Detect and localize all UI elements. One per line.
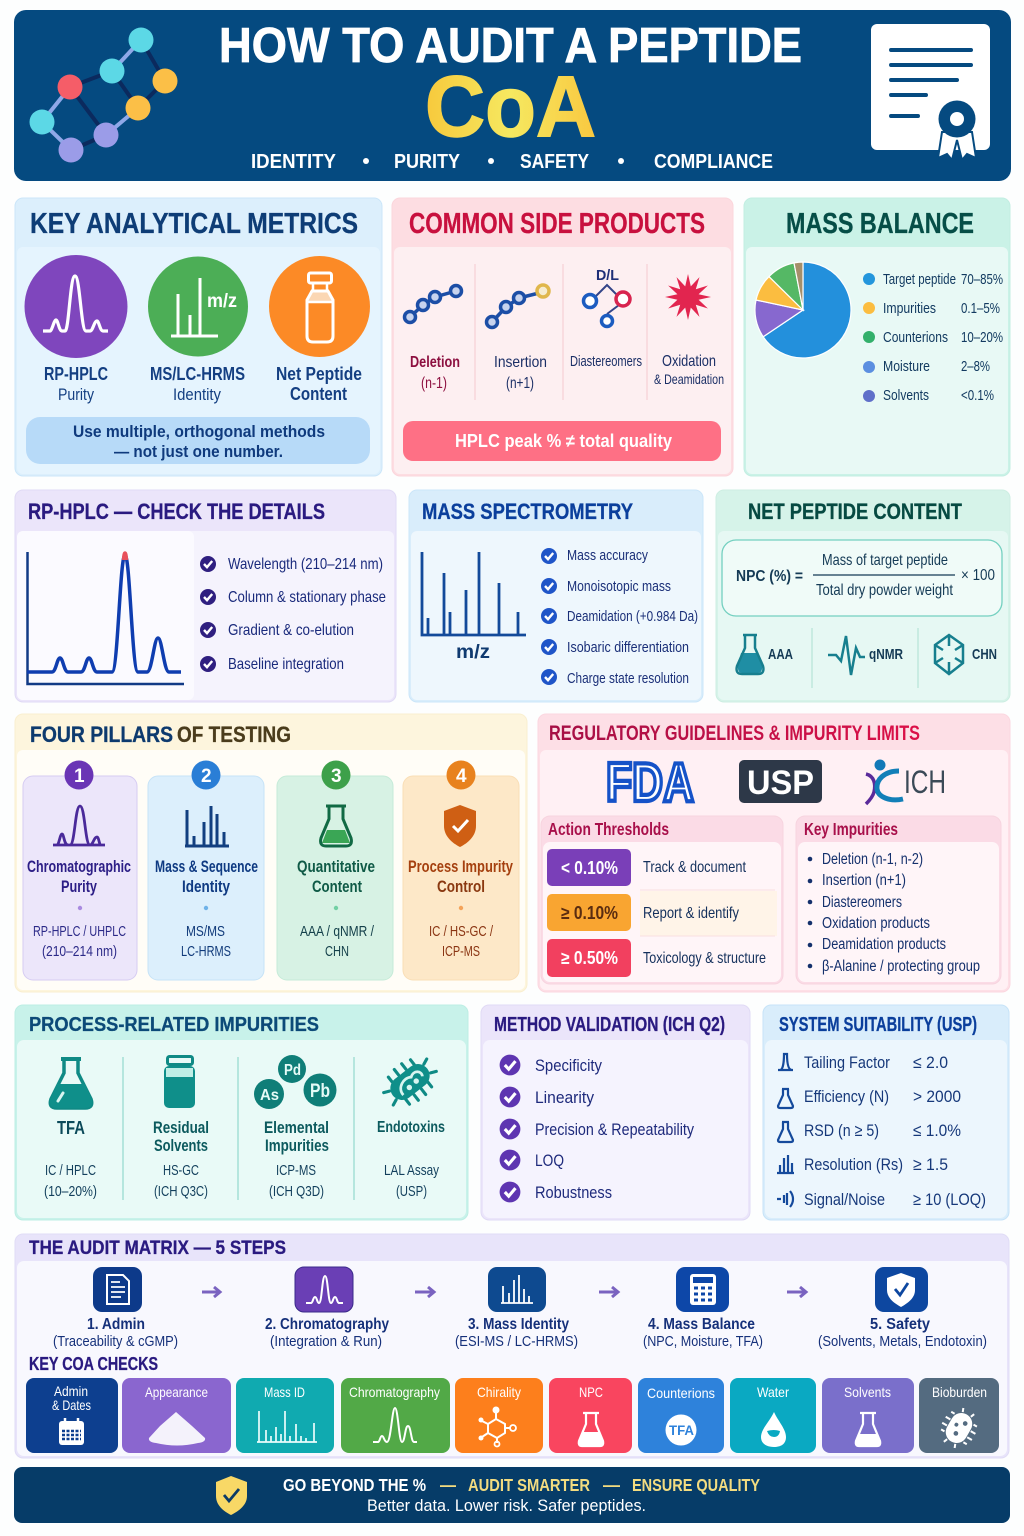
side product labels bbox=[410, 353, 724, 392]
pillar 1: chromatographic purity: 1 bbox=[74, 766, 85, 787]
tile: chirality bbox=[455, 1378, 543, 1453]
panel: mass spectrometry bbox=[409, 490, 703, 702]
check list: Column & stationary phase bbox=[228, 589, 386, 606]
step 2: chromatography: (Integration & Run) bbox=[270, 1334, 382, 1350]
tile: chromatography bbox=[341, 1378, 450, 1453]
suitability table: Tailing Factor bbox=[804, 1053, 890, 1072]
impurity labels: TFA bbox=[57, 1118, 85, 1138]
footer headline: AUDIT SMARTER bbox=[468, 1475, 590, 1495]
step 4: mass balance: (NPC, Moisture, TFA) bbox=[643, 1334, 763, 1350]
footer headline: — bbox=[440, 1475, 456, 1495]
icon: MS circle bbox=[148, 256, 248, 356]
test methods: IC / HPLC bbox=[45, 1162, 96, 1179]
action thresholds box: Toxicology & structure bbox=[643, 950, 766, 967]
icon: TFA flask bbox=[50, 1059, 92, 1108]
icon: vial circle bbox=[269, 256, 370, 357]
panel: four pillars of testing bbox=[15, 714, 527, 992]
tile: mass ID: Mass ID bbox=[264, 1384, 305, 1400]
formula box bbox=[722, 540, 1002, 616]
icon: deletion chain bbox=[404, 286, 462, 322]
subtitle pillars bbox=[251, 151, 773, 173]
threshold chip: 0.10: ≥ 0.10% bbox=[561, 903, 618, 923]
test methods bbox=[44, 1162, 439, 1200]
validation check list: LOQ bbox=[535, 1151, 564, 1170]
footer headline: — bbox=[603, 1475, 620, 1495]
icon: oxidation star bbox=[665, 274, 711, 320]
threshold chip: below 0.10 bbox=[547, 849, 631, 886]
pillar 3: quantitative content: Content bbox=[312, 878, 362, 896]
tile: NPC bbox=[549, 1378, 632, 1453]
pillar 4: process impurity control: Process Impurity bbox=[408, 858, 514, 876]
test methods: (ICH Q3C) bbox=[154, 1183, 208, 1200]
formula box: NPC (%) = bbox=[736, 568, 803, 585]
pillar 3: quantitative content: 3 bbox=[331, 766, 342, 787]
footer headline: ENSURE QUALITY bbox=[632, 1475, 760, 1495]
validation check list bbox=[500, 1055, 694, 1202]
pillar 2: mass and sequence identity: Mass & Sequence bbox=[155, 858, 258, 876]
key impurities box: Key Impurities bbox=[804, 819, 898, 839]
panel: mass balance bbox=[744, 198, 1010, 476]
check list: Deamidation (+0.984 Da) bbox=[567, 608, 698, 625]
key impurities box: Oxidation products bbox=[822, 915, 930, 932]
pillar 4: process impurity control: IC / HS-GC / bbox=[429, 923, 494, 940]
suitability table: ≤ 2.0 bbox=[913, 1053, 948, 1072]
heading: RP-HPLC — CHECK THE DETAILS bbox=[28, 499, 325, 524]
legend: Moisture bbox=[883, 358, 930, 375]
heading: THE AUDIT MATRIX — 5 STEPS bbox=[29, 1237, 286, 1259]
tile: admin and dates: Admin bbox=[54, 1383, 88, 1399]
test methods: LAL Assay bbox=[384, 1162, 439, 1179]
suitability table bbox=[804, 1053, 986, 1209]
pillar 1: chromatographic purity bbox=[23, 760, 137, 980]
step 1: admin: (Traceability & cGMP) bbox=[53, 1334, 178, 1350]
pillar 2: mass and sequence identity: Identity bbox=[182, 878, 231, 896]
subtitle pillars: COMPLIANCE bbox=[654, 151, 773, 173]
logo: USP: USP bbox=[747, 764, 814, 802]
arrow bbox=[599, 1287, 618, 1297]
icon: peptide molecule network bbox=[30, 28, 178, 162]
step 5: safety: 5. Safety bbox=[870, 1316, 930, 1333]
pillar 3: quantitative content: CHN bbox=[325, 943, 349, 960]
icon: certificate document bbox=[871, 24, 990, 160]
icon: elemental impurities: Pd bbox=[284, 1062, 301, 1079]
metric labels: Purity bbox=[58, 385, 94, 404]
test methods: (USP) bbox=[396, 1183, 427, 1200]
suitability table: Signal/Noise bbox=[804, 1190, 885, 1209]
panel: common side products bbox=[392, 198, 733, 476]
pillar 4: process impurity control: 4 bbox=[456, 766, 467, 787]
heading: MASS BALANCE bbox=[786, 208, 974, 240]
action thresholds box: Action Thresholds bbox=[548, 819, 669, 839]
heading: COMMON SIDE PRODUCTS bbox=[409, 208, 705, 240]
legend: Target peptide bbox=[883, 271, 956, 288]
suitability table: ≤ 1.0% bbox=[913, 1121, 961, 1140]
tile: NPC: NPC bbox=[579, 1384, 603, 1400]
validation check list: Precision & Repeatability bbox=[535, 1120, 694, 1139]
icon: CHN hexagon: CHN bbox=[972, 646, 997, 663]
pillar 2: mass and sequence identity: 2 bbox=[201, 766, 212, 787]
arrow bbox=[787, 1287, 806, 1297]
icon: AAA flask bbox=[737, 635, 793, 674]
icon: elemental impurities bbox=[254, 1055, 336, 1109]
pillar 2: mass and sequence identity bbox=[148, 760, 264, 980]
heading: NET PEPTIDE CONTENT bbox=[748, 499, 962, 524]
check list: Mass accuracy bbox=[567, 547, 648, 564]
key impurities box: Insertion (n+1) bbox=[822, 872, 906, 889]
side product labels: Oxidation bbox=[662, 353, 716, 370]
pillar 1: chromatographic purity: Chromatographic bbox=[27, 858, 131, 876]
impurity labels: Residual bbox=[153, 1119, 209, 1137]
icon: insertion chain bbox=[486, 285, 549, 328]
formula box: × 100 bbox=[961, 567, 995, 584]
tile: admin and dates bbox=[26, 1378, 118, 1453]
mass spectrum: m/z bbox=[456, 642, 490, 663]
callout: orthogonal methods: — not just one number. bbox=[114, 442, 283, 461]
arrow bbox=[415, 1287, 434, 1297]
tile: bioburden bbox=[919, 1378, 999, 1453]
key impurities box: Deletion (n-1, n-2) bbox=[822, 851, 923, 868]
mass spectrum bbox=[422, 552, 526, 663]
icon: qNMR pulse: qNMR bbox=[869, 646, 903, 663]
callout: orthogonal methods bbox=[26, 417, 370, 464]
subheading: key CoA checks: KEY COA CHECKS bbox=[29, 1353, 158, 1374]
legend: 70–85% bbox=[961, 271, 1003, 288]
check list: Gradient & co-elution bbox=[228, 622, 354, 639]
heading: KEY ANALYTICAL METRICS bbox=[30, 208, 358, 240]
tile: counterions: TFA bbox=[669, 1422, 694, 1438]
step 4: mass balance: 4. Mass Balance bbox=[648, 1316, 755, 1333]
legend: Solvents bbox=[883, 387, 929, 404]
icon: CHN hexagon bbox=[935, 635, 997, 674]
check list bbox=[200, 556, 386, 673]
heading: MASS SPECTROMETRY bbox=[422, 499, 633, 524]
pie chart bbox=[755, 262, 851, 358]
step 2: chromatography: 2. Chromatography bbox=[265, 1316, 389, 1333]
callout: orthogonal methods: Use multiple, orthogonal methods bbox=[73, 422, 325, 441]
test methods: ICP-MS bbox=[276, 1162, 316, 1179]
step 3: mass identity: (ESI-MS / LC-HRMS) bbox=[455, 1334, 578, 1350]
icon: elemental impurities: As bbox=[260, 1087, 279, 1104]
logo: ICH bbox=[866, 760, 946, 804]
pillar 1: chromatographic purity: RP-HPLC / UHPLC bbox=[33, 923, 126, 940]
suitability table: ≥ 1.5 bbox=[913, 1155, 948, 1174]
step 5: safety: (Solvents, Metals, Endotoxin) bbox=[818, 1334, 987, 1350]
pillar 3: quantitative content bbox=[277, 760, 393, 980]
tile: chirality: Chirality bbox=[477, 1384, 521, 1400]
heading: FOUR PILLARS bbox=[30, 722, 173, 747]
pillar 4: process impurity control: ICP-MS bbox=[442, 943, 480, 960]
chromatogram bbox=[27, 552, 184, 684]
key impurities box: Diastereomers bbox=[822, 894, 902, 911]
test methods: (10–20%) bbox=[44, 1183, 97, 1200]
panel: key analytical metrics bbox=[15, 198, 382, 476]
impurity labels: Elemental bbox=[264, 1119, 329, 1137]
impurity labels: Endotoxins bbox=[377, 1119, 445, 1136]
tile: admin and dates: & Dates bbox=[52, 1397, 91, 1413]
validation check list: Specificity bbox=[535, 1056, 602, 1075]
check list: Monoisotopic mass bbox=[567, 578, 671, 595]
suitability table: RSD (n ≥ 5) bbox=[804, 1121, 879, 1140]
logo: FDA: FDA bbox=[606, 751, 694, 813]
metric labels: RP-HPLC bbox=[44, 364, 108, 384]
icon: endotoxin bacterium bbox=[376, 1050, 444, 1114]
icon: diastereomers bbox=[584, 267, 630, 326]
test methods: (ICH Q3D) bbox=[269, 1183, 324, 1200]
subtitle pillars: SAFETY bbox=[520, 151, 590, 173]
side product labels: & Deamidation bbox=[654, 371, 724, 387]
tile: water: Water bbox=[757, 1384, 789, 1400]
impurity labels: Impurities bbox=[265, 1137, 329, 1155]
panel: method validation bbox=[481, 1005, 750, 1220]
title: HOW TO AUDIT A PEPTIDE bbox=[219, 19, 802, 73]
footer tagline: Better data. Lower risk. Safer peptides. bbox=[367, 1497, 646, 1515]
step 2: chromatography bbox=[265, 1267, 389, 1350]
formula box: Total dry powder weight bbox=[816, 582, 953, 599]
tile: counterions bbox=[638, 1378, 724, 1453]
side product labels: (n+1) bbox=[506, 375, 534, 392]
icon: quality shield bbox=[216, 1476, 247, 1515]
legend: Counterions bbox=[883, 329, 948, 346]
action thresholds box bbox=[541, 816, 783, 984]
icon: AAA flask: AAA bbox=[768, 646, 793, 663]
icon: residual solvents bottle bbox=[164, 1056, 195, 1108]
panel: net peptide content bbox=[716, 490, 1010, 702]
subtitle pillars: IDENTITY bbox=[251, 151, 337, 173]
legend: 2–8% bbox=[961, 358, 990, 375]
metric labels: MS/LC-HRMS bbox=[150, 364, 245, 384]
callout: HPLC peak warning: HPLC peak % ≠ total quality bbox=[455, 431, 672, 451]
tile: chromatography: Chromatography bbox=[349, 1384, 440, 1400]
impurity labels: Solvents bbox=[154, 1137, 208, 1155]
step 1: admin: 1. Admin bbox=[87, 1316, 145, 1333]
tile: water bbox=[730, 1378, 816, 1453]
step 5: safety bbox=[818, 1267, 987, 1350]
side product labels: Diastereomers bbox=[570, 353, 642, 370]
heading: PROCESS-RELATED IMPURITIES bbox=[29, 1013, 319, 1036]
tile: appearance: Appearance bbox=[145, 1384, 208, 1400]
pillar 4: process impurity control: Control bbox=[437, 878, 485, 896]
legend: <0.1% bbox=[961, 387, 994, 404]
title: CoA: CoA bbox=[425, 59, 596, 155]
icon: qNMR pulse bbox=[828, 636, 903, 675]
pillar 3: quantitative content: AAA / qNMR / bbox=[300, 923, 375, 940]
side product labels: (n-1) bbox=[421, 375, 447, 392]
panel: system suitability bbox=[763, 1005, 1009, 1220]
key impurities box: Deamidation products bbox=[822, 936, 946, 953]
tile: counterions: Counterions bbox=[647, 1385, 715, 1401]
test methods: HS-GC bbox=[163, 1162, 199, 1179]
panel: RP-HPLC details bbox=[15, 490, 396, 702]
icon: RP-HPLC circle bbox=[24, 255, 128, 358]
check list: Charge state resolution bbox=[567, 670, 689, 687]
check list: Wavelength (210–214 nm) bbox=[228, 556, 383, 573]
legend: 0.1–5% bbox=[961, 300, 1000, 317]
threshold chip: below 0.10: < 0.10% bbox=[561, 858, 618, 878]
key impurities box bbox=[796, 816, 1001, 984]
side product labels: Deletion bbox=[410, 354, 460, 371]
footer banner bbox=[14, 1467, 1010, 1523]
validation check list: Linearity bbox=[535, 1088, 594, 1107]
icon: elemental impurities: Pb bbox=[310, 1081, 330, 1102]
metric labels: Content bbox=[290, 384, 347, 404]
panel: regulatory guidelines and impurity limits bbox=[538, 714, 1010, 992]
step 3: mass identity: 3. Mass Identity bbox=[468, 1316, 569, 1333]
legend bbox=[863, 271, 1003, 404]
tile: mass ID bbox=[236, 1378, 334, 1453]
metric labels: Net Peptide bbox=[276, 364, 362, 384]
suitability table: Resolution (Rs) bbox=[804, 1155, 903, 1174]
pillar 2: mass and sequence identity: MS/MS bbox=[186, 923, 225, 940]
tile: solvents: Solvents bbox=[844, 1384, 891, 1400]
step 1: admin bbox=[53, 1267, 178, 1350]
panel: four pillars of testing: OF TESTING bbox=[177, 722, 291, 747]
suitability icons bbox=[777, 1054, 794, 1207]
pillar 1: chromatographic purity: Purity bbox=[61, 878, 98, 896]
metric labels bbox=[44, 364, 362, 404]
pillar 4: process impurity control bbox=[403, 760, 519, 980]
header banner bbox=[14, 10, 1011, 181]
subtitle pillars: PURITY bbox=[394, 151, 461, 173]
key impurities box: β-Alanine / protecting group bbox=[822, 958, 980, 975]
threshold chip: 0.10 bbox=[547, 894, 631, 931]
action thresholds box: Report & identify bbox=[643, 905, 739, 922]
validation check list: Robustness bbox=[535, 1183, 612, 1202]
suitability table: Efficiency (N) bbox=[804, 1087, 889, 1106]
step 4: mass balance bbox=[643, 1267, 763, 1350]
threshold chip: 0.50: ≥ 0.50% bbox=[561, 948, 618, 968]
footer headline: GO BEYOND THE % bbox=[283, 1475, 426, 1495]
legend: 10–20% bbox=[961, 329, 1003, 346]
check list: Baseline integration bbox=[228, 656, 344, 673]
action thresholds box: Track & document bbox=[643, 859, 746, 876]
heading: METHOD VALIDATION (ICH Q2) bbox=[494, 1013, 725, 1036]
check list: Isobaric differentiation bbox=[567, 639, 689, 656]
icon: diastereomers: D/L bbox=[596, 267, 619, 284]
formula box: Mass of target peptide bbox=[822, 552, 948, 569]
pillar 2: mass and sequence identity: LC-HRMS bbox=[181, 943, 231, 960]
arrow bbox=[202, 1287, 220, 1297]
suitability table: ≥ 10 (LOQ) bbox=[913, 1190, 986, 1209]
pillar 3: quantitative content: Quantitative bbox=[297, 858, 375, 876]
panel: process-related impurities bbox=[15, 1005, 468, 1220]
tile: bioburden: Bioburden bbox=[932, 1384, 987, 1400]
tile: solvents bbox=[822, 1378, 914, 1453]
legend: Impurities bbox=[883, 300, 936, 317]
step 3: mass identity bbox=[455, 1267, 578, 1350]
footer headline bbox=[283, 1475, 760, 1495]
impurity labels bbox=[57, 1118, 445, 1155]
side product labels: Insertion bbox=[494, 354, 547, 371]
metric labels: Identity bbox=[173, 385, 221, 404]
callout: HPLC peak warning bbox=[403, 421, 721, 461]
check list bbox=[541, 547, 698, 687]
logo: ICH: ICH bbox=[904, 764, 946, 800]
panel: audit matrix bbox=[15, 1234, 1009, 1458]
icon: MS circle: m/z bbox=[207, 291, 237, 312]
suitability table: > 2000 bbox=[913, 1087, 961, 1106]
pillar 1: chromatographic purity: (210–214 nm) bbox=[42, 943, 117, 960]
tile: appearance bbox=[122, 1378, 231, 1453]
threshold chip: 0.50 bbox=[547, 939, 631, 977]
